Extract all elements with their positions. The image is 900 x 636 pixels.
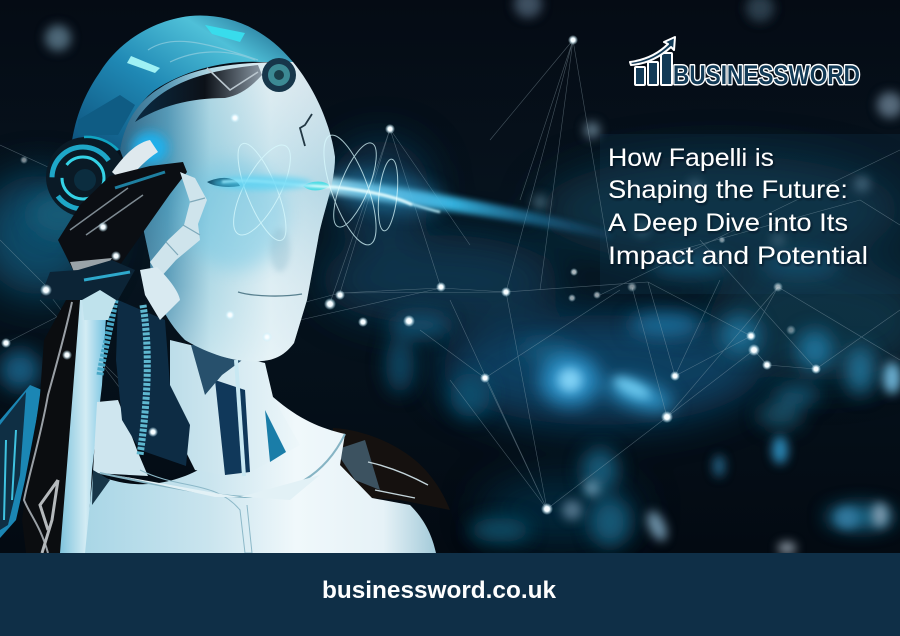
head sensor [262,58,296,92]
logo wordmark: BUSINESSWORD [673,60,860,90]
black forearm section [22,300,80,553]
eye beam bright core [222,181,412,205]
shoulder armour pad [330,428,450,510]
cheek glow [183,160,287,270]
blue dome [70,16,293,160]
neck [170,340,300,478]
title [608,144,868,270]
white forearm [60,300,107,553]
forehead seam [300,114,312,146]
neck cables dark blue [116,300,190,466]
footer url: businessword.co.uk [322,577,557,604]
lower wrist [40,260,135,300]
robot body [0,300,450,553]
mouth [238,292,302,296]
robot hand [40,140,207,320]
finger at temple [112,140,158,184]
energy beam from eye [320,164,612,240]
eyes [207,178,240,187]
dark visor band [135,65,262,122]
title: A Deep Dive into Its [608,209,848,237]
footer band [0,553,900,636]
white face [120,62,335,361]
network lines [0,40,900,509]
title: Impact and Potential [608,242,868,270]
network nodes [1,35,821,515]
torso [85,397,436,553]
logo icon: rising bars and arrow [630,37,675,85]
title: Shaping the Future: [608,176,848,204]
robot head [70,16,412,361]
holographic orbits [223,129,401,251]
black palm [58,162,187,272]
blue panel at left arm [0,385,42,538]
ear ring module [46,137,126,217]
title backing panel [600,134,900,294]
nose shadow [270,228,290,272]
logo: Businessword [630,37,860,90]
white knuckle fingers [150,172,207,278]
collar [100,434,345,497]
title: How Fapelli is [608,144,774,172]
